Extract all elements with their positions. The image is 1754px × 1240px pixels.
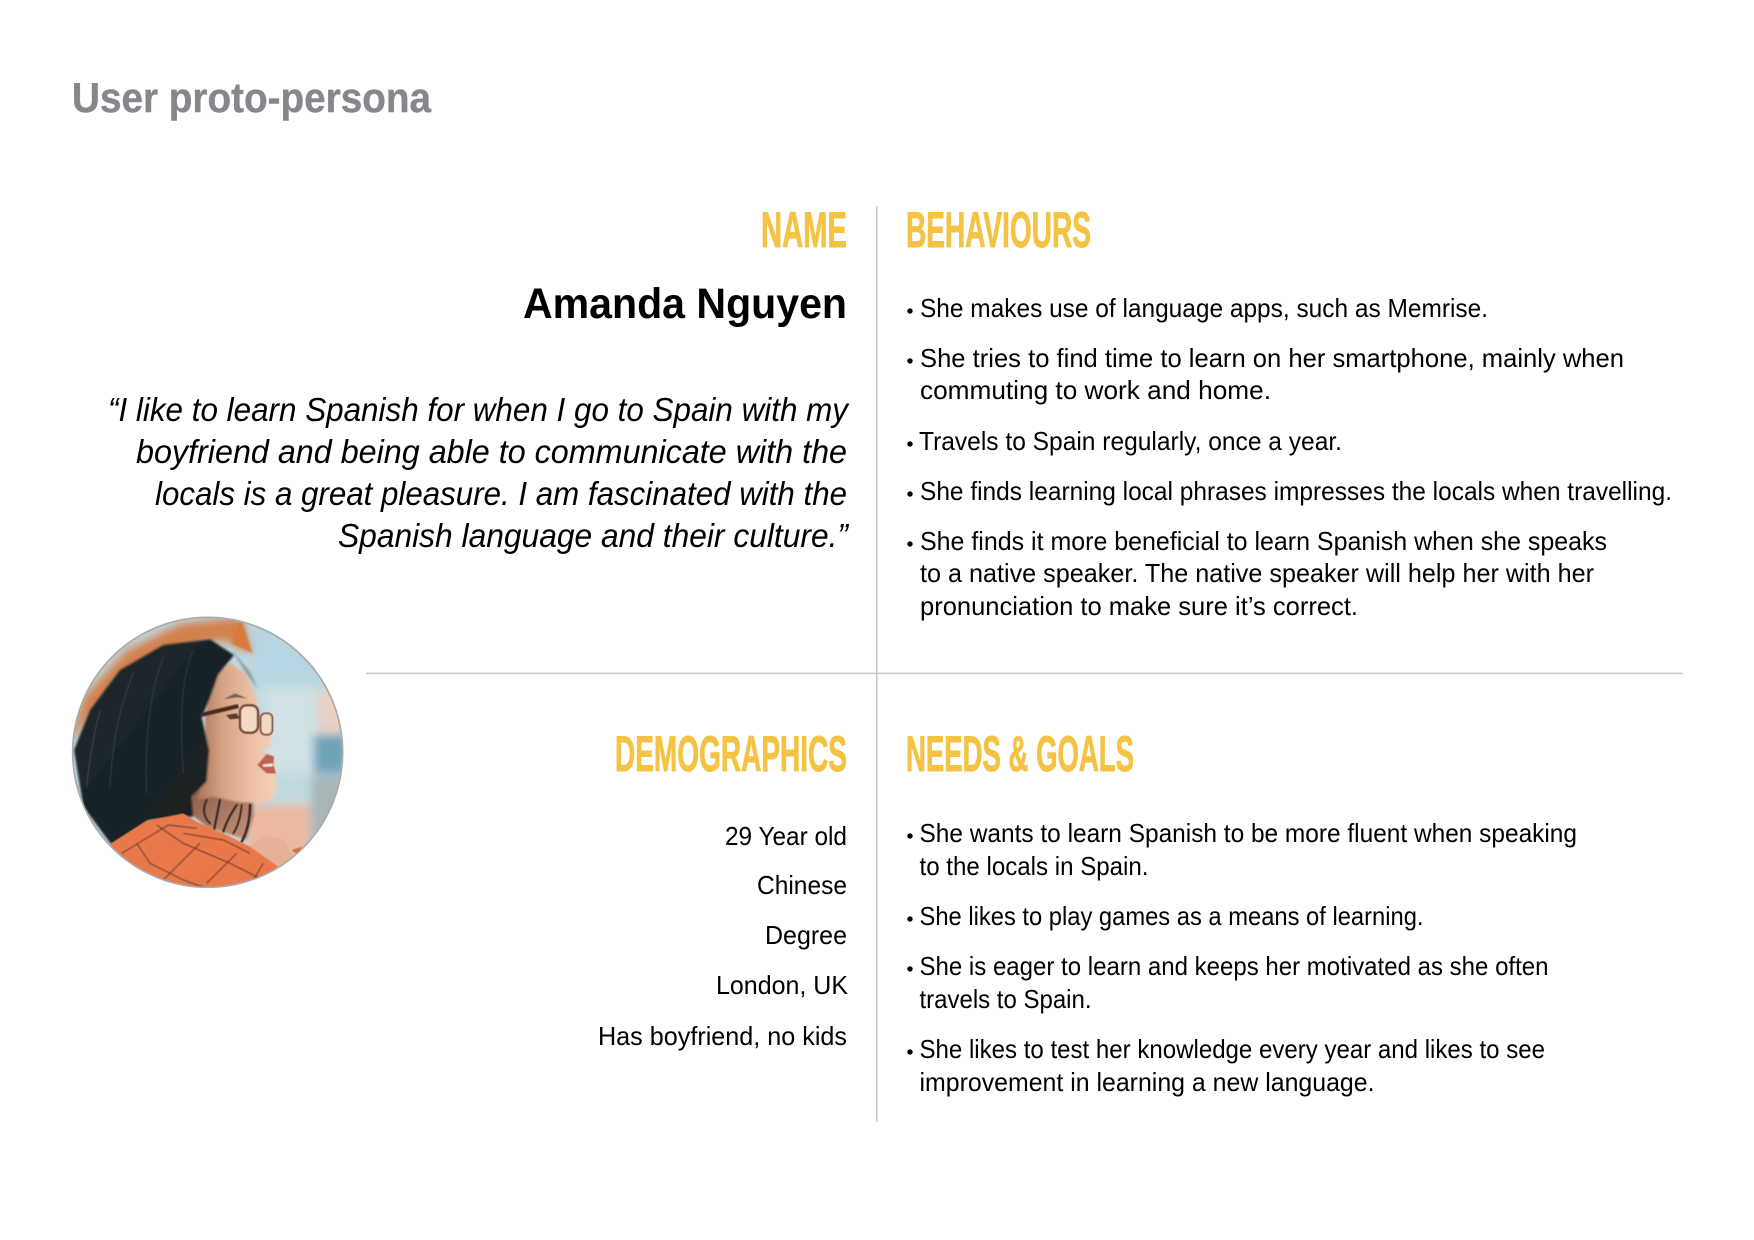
hand: [250, 835, 293, 868]
needs and goals list: to the locals in Spain.: [920, 851, 1148, 881]
behaviours list: [907, 293, 1672, 621]
needs and goals list: [907, 818, 1577, 1097]
glasses: [201, 706, 238, 715]
demographics list: Degree: [765, 920, 847, 950]
behaviours list: to a native speaker. The native speaker will help her with her: [920, 558, 1594, 588]
demographics list: Chinese: [757, 870, 847, 900]
shirt: [110, 813, 278, 893]
behaviours list: She tries to find time to learn on her smartphone, mainly when: [920, 343, 1624, 373]
hair: [74, 639, 234, 845]
panel: behaviours: [906, 202, 1672, 621]
heading: demographics: DEMOGRAPHICS: [615, 726, 847, 782]
behaviours list: commuting to work and home.: [920, 375, 1271, 405]
needs and goals list: She likes to play games as a means of learning.: [920, 901, 1424, 931]
portrait photo: [67, 613, 348, 893]
hair strands: [87, 710, 100, 787]
needs and goals list: She wants to learn Spanish to be more fluent when speaking: [920, 818, 1577, 848]
demographics list: London, UK: [716, 970, 849, 1000]
heading: needs and goals: NEEDS & GOALS: [906, 726, 1134, 782]
panel: needs and goals: [906, 726, 1577, 1097]
quote: “I like to learn Spanish for when I go to Spain with my: [108, 391, 850, 428]
quote: [108, 391, 850, 554]
horizontal divider: [366, 673, 1683, 674]
quote: locals is a great pleasure. I am fascinated with the: [155, 475, 847, 512]
panel: name and quote: [108, 202, 850, 554]
heading: name: NAME: [761, 202, 847, 258]
quote: boyfriend and being able to communicate with the: [136, 433, 847, 470]
behaviours list: She makes use of language apps, such as Memrise.: [920, 293, 1488, 323]
needs and goals list: She likes to test her knowledge every year and likes to see: [920, 1034, 1545, 1064]
behaviours list: She finds it more beneficial to learn Spanish when she speaks: [920, 526, 1607, 556]
heading: behaviours: BEHAVIOURS: [906, 202, 1091, 258]
lips: [257, 754, 276, 773]
behaviours list: pronunciation to make sure it’s correct.: [920, 591, 1358, 621]
neck: [190, 787, 254, 840]
quote: Spanish language and their culture.”: [338, 517, 850, 554]
behaviours list: She finds learning local phrases impresses the locals when travelling.: [920, 476, 1672, 506]
vertical divider: [876, 206, 878, 1122]
demographics list: Has boyfriend, no kids: [598, 1021, 847, 1051]
needs and goals list: travels to Spain.: [920, 984, 1092, 1014]
face: [197, 663, 276, 803]
demographics list: [598, 821, 849, 1051]
eyebrow and eye: [223, 693, 247, 699]
panel: demographics: [598, 726, 849, 1051]
persona name: Amanda Nguyen: [523, 280, 847, 328]
needs and goals list: She is eager to learn and keeps her motivated as she often: [920, 951, 1548, 981]
title: User proto-persona: [72, 74, 432, 121]
demographics list: 29 Year old: [725, 821, 847, 851]
behaviours list: Travels to Spain regularly, once a year.: [919, 426, 1342, 456]
needs and goals list: improvement in learning a new language.: [920, 1067, 1374, 1097]
